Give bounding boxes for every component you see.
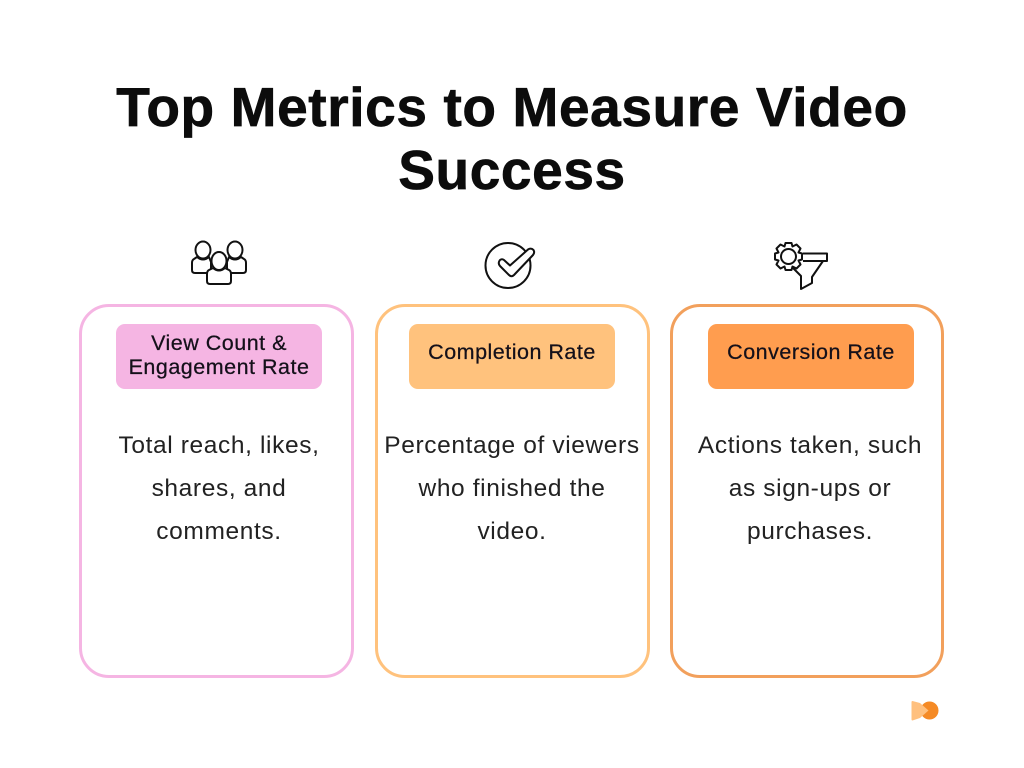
text: view count description: comments. [156, 518, 282, 545]
badge: view count and engagement rate [116, 324, 322, 389]
title: Top Metrics to Measure Video [116, 76, 908, 138]
panel: completion rate [375, 304, 650, 678]
text: completion rate description [384, 432, 640, 545]
text: completion rate description: who finished the [418, 475, 605, 502]
badge: completion rate [409, 324, 615, 389]
badge: conversion rate [708, 324, 914, 389]
text: conversion rate description [698, 432, 922, 545]
title [116, 76, 908, 201]
text: conversion rate description: purchases. [747, 518, 873, 545]
text: view count description: Total reach, likes, [118, 432, 320, 459]
text: view count description [118, 432, 320, 545]
text: view count description: shares, and [152, 475, 286, 502]
text: completion rate description: Percentage of viewers [384, 432, 640, 459]
panel: conversion rate [670, 304, 944, 678]
text: conversion rate description: as sign-ups or [729, 475, 891, 502]
title: Success [398, 139, 626, 201]
icon: gear and funnel [774, 242, 828, 290]
badge: view count and engagement rate: View Count & [151, 331, 287, 355]
text: conversion rate description: Actions taken, such [698, 432, 922, 459]
icon: check circle [484, 242, 536, 289]
icon: people group [191, 240, 247, 285]
badge: completion rate: Completion Rate [428, 340, 596, 364]
text: completion rate description: video. [477, 518, 547, 545]
badge: view count and engagement rate: Engagement Rate [129, 355, 309, 379]
badge: conversion rate: Conversion Rate [727, 340, 895, 364]
panel: view count and engagement rate [79, 304, 354, 678]
logo [912, 701, 938, 720]
